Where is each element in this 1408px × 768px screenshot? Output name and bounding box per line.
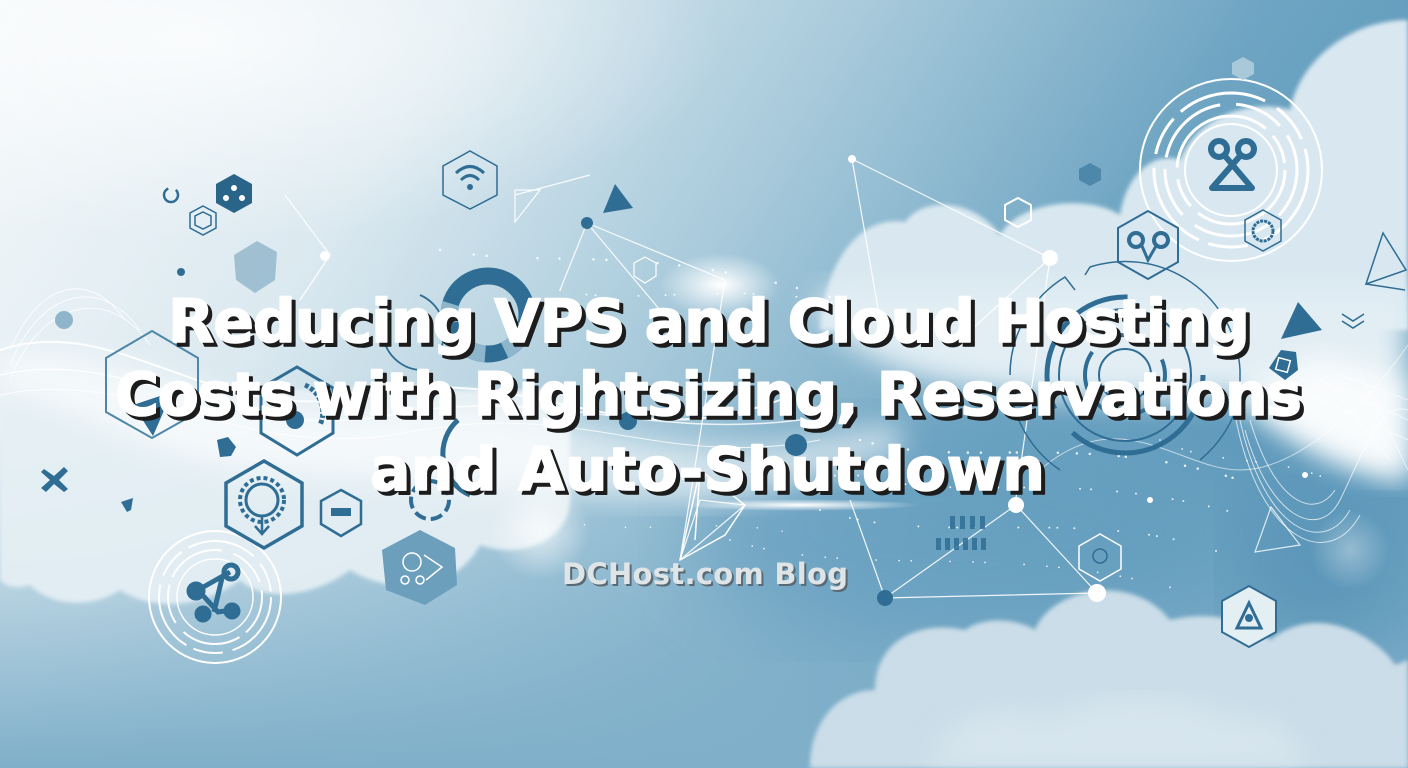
network lines and nodes bbox=[285, 159, 1097, 598]
cloud: left band bbox=[0, 390, 570, 604]
icon: bar matrix bbox=[936, 516, 986, 550]
icon: gear rings right bbox=[1010, 261, 1240, 470]
icon: large gear hexagon bbox=[226, 461, 302, 548]
icon: hexagon bottom right bbox=[1222, 586, 1276, 647]
icon: hexagon with nodes bbox=[1118, 211, 1178, 279]
icon: outline triangle bottom right bbox=[1255, 507, 1300, 552]
icon: triangle top center bbox=[603, 184, 633, 213]
white wave band bbox=[0, 289, 1408, 542]
icon: white rings bottom left bbox=[149, 531, 281, 663]
icon: triangle left bbox=[133, 392, 172, 436]
icon: dark hexagon top left bbox=[216, 174, 252, 213]
cloud: bottom right bbox=[810, 590, 1408, 768]
icon: small hexagon with chip bbox=[321, 490, 361, 536]
icon: small outline hexagons center bbox=[634, 198, 1031, 283]
cloud: bottom right highlight bbox=[930, 698, 1310, 768]
icon: outline hexagon bbox=[190, 206, 216, 235]
icon: hexagon small bottom bbox=[1079, 534, 1121, 581]
icon: soft hexagon bbox=[234, 241, 277, 293]
icon: chevrons bbox=[1342, 314, 1364, 328]
icon: scissors triangle bbox=[1211, 141, 1254, 188]
icon: share nodes bbox=[189, 565, 238, 620]
icon: pyramid right bbox=[1366, 233, 1406, 290]
cloud: top right bbox=[820, 20, 1408, 330]
icon: circular arrows bbox=[383, 295, 444, 370]
subtitle: DCHost.com Blog bbox=[562, 557, 848, 591]
icon: gear hexagon left bbox=[261, 367, 333, 455]
icon: soft hexagon bottom center bbox=[382, 530, 457, 605]
icon: donut center bbox=[449, 276, 527, 354]
icon: wireframe polygon center bbox=[680, 470, 745, 560]
icon: solid triangle right bbox=[1281, 302, 1322, 339]
star dust bbox=[440, 250, 1350, 590]
title: and Auto-Shutdown bbox=[370, 435, 1045, 505]
icon: ring segments center bbox=[411, 412, 637, 519]
icon: pale hexagon top bbox=[1232, 57, 1254, 80]
icon: large outline hexagon left bbox=[106, 331, 198, 438]
title: Costs with Rightsizing, Reservations bbox=[115, 360, 1302, 430]
cloud: lower body fading into blue bbox=[820, 290, 1408, 478]
icon: white rings top right bbox=[1140, 79, 1322, 261]
icon: small ring bbox=[164, 188, 178, 202]
title: Reducing VPS and Cloud Hosting bbox=[168, 287, 1250, 357]
icon: dark polygon with square bbox=[1269, 350, 1298, 380]
icon: small dark hexagon top right bbox=[1079, 163, 1101, 186]
title bbox=[115, 287, 1302, 505]
glowing particles bbox=[490, 253, 1390, 590]
icon: gear hexagon bbox=[1245, 210, 1281, 251]
icon: wifi hexagon bbox=[443, 151, 497, 209]
icon: drop shapes and cross bbox=[41, 311, 236, 512]
